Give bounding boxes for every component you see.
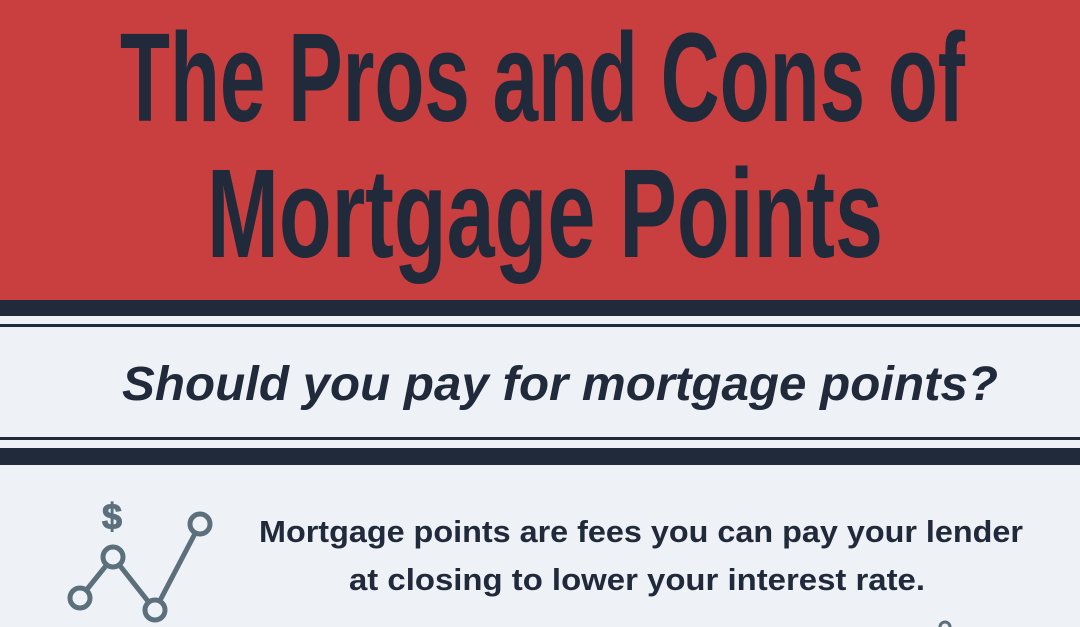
definition text: at closing to lower your interest rate. bbox=[349, 562, 925, 597]
icon: dollar chart bbox=[70, 496, 210, 620]
title bbox=[120, 7, 966, 284]
icon: dollar chart: $ bbox=[102, 496, 122, 537]
header band bbox=[0, 0, 1080, 300]
definition text: Mortgage points are fees you can pay your lender bbox=[259, 514, 1023, 549]
definition text bbox=[259, 514, 1023, 597]
subtitle: Should you pay for mortgage points? bbox=[122, 358, 998, 411]
icon: partial bbox=[940, 622, 950, 627]
